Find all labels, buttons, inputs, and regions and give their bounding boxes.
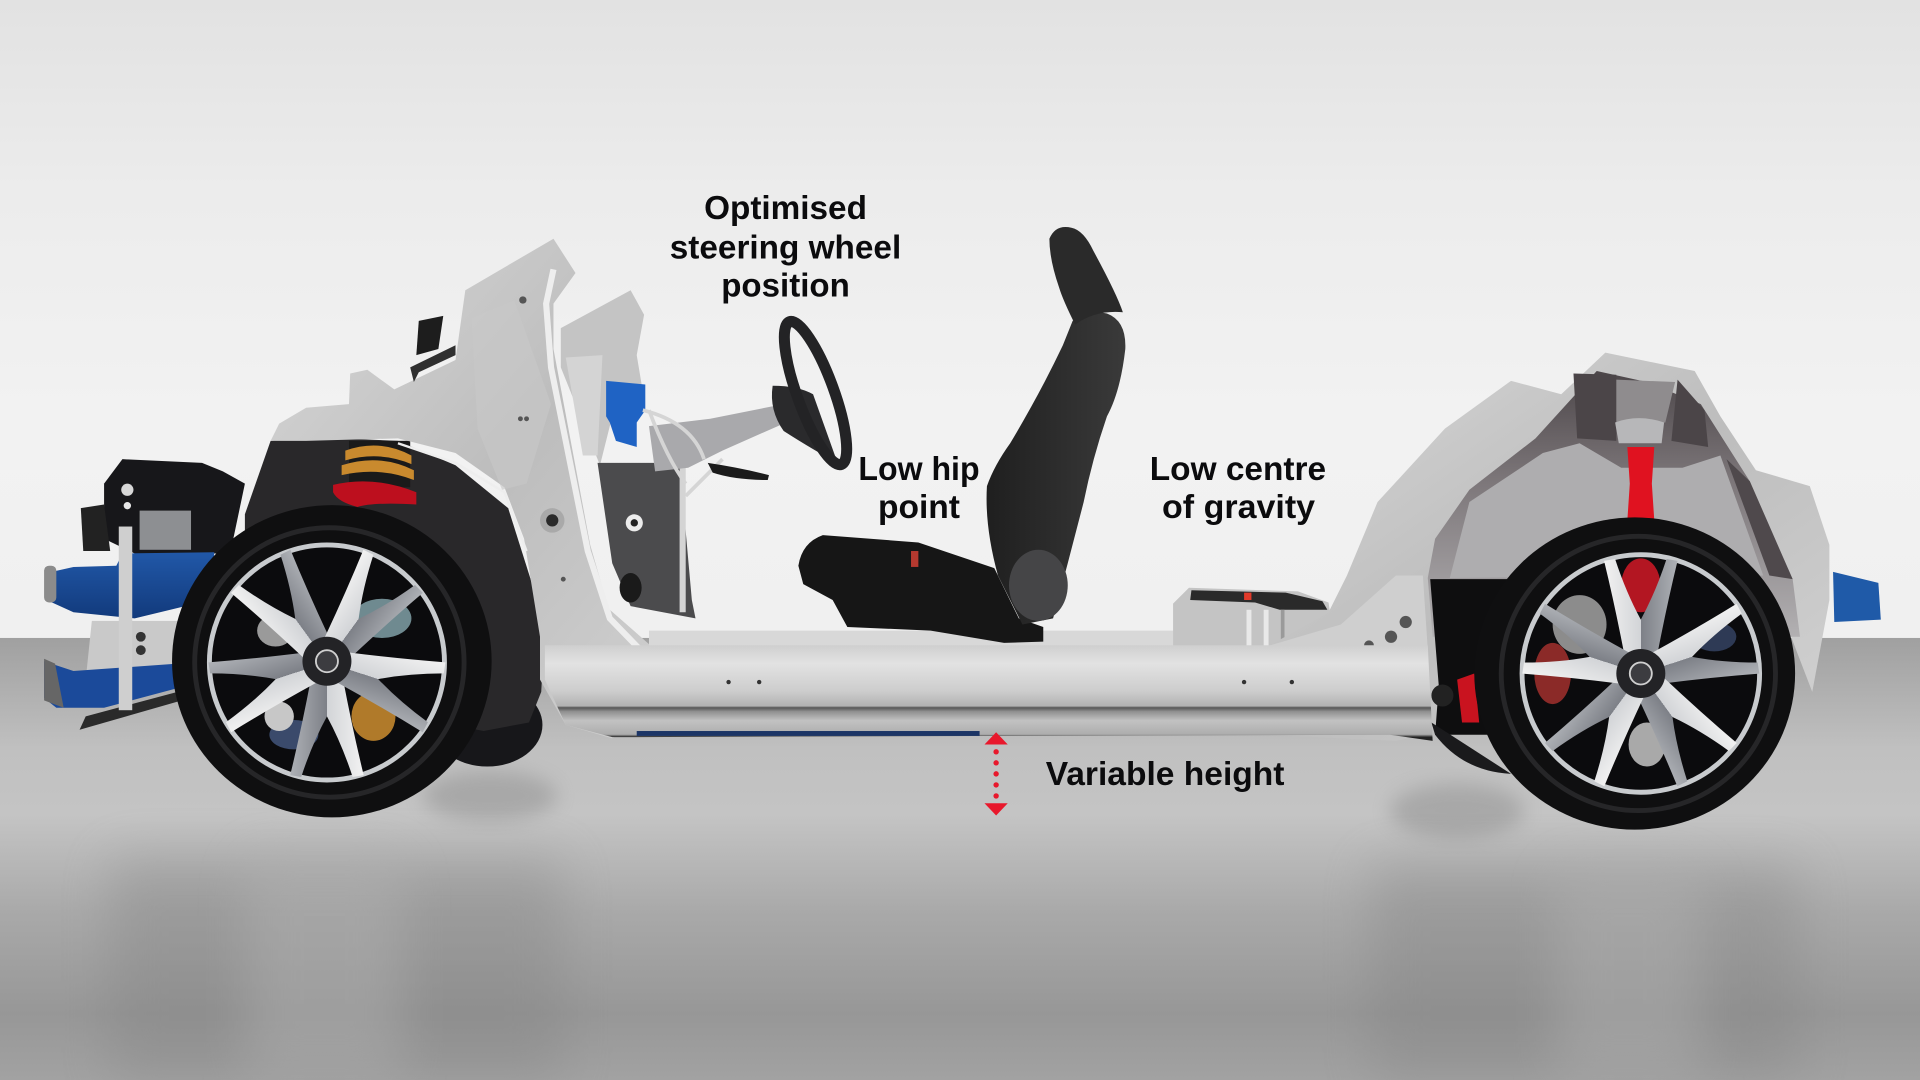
rear strut red: [1615, 418, 1664, 520]
label: low centre of gravity: Low centre: [1150, 451, 1326, 488]
spokes: [207, 548, 447, 777]
front module: radiator and crash structure: [44, 459, 245, 730]
tyre: [172, 505, 492, 817]
inner pillar and footwell: [561, 290, 696, 618]
label: low hip point: Low hip: [858, 451, 980, 488]
polished floor: [0, 638, 1920, 1080]
label: low hip point: [858, 451, 980, 526]
rim: [209, 545, 444, 780]
far side tyre, front axle: [432, 683, 542, 767]
wall backdrop: [0, 0, 1920, 639]
tyre: [1474, 517, 1795, 830]
floor pan: [649, 631, 1176, 650]
label: low centre of gravity: of gravity: [1162, 489, 1316, 526]
rear floor ramp: [1266, 576, 1428, 659]
rear wheel: [1474, 517, 1795, 830]
floor reflections: [110, 771, 1800, 1080]
seat backrest: [987, 313, 1125, 624]
label: steering wheel position: [670, 190, 901, 304]
blue steering bracket: [606, 381, 645, 447]
front wheel arch interior: [245, 437, 545, 731]
hub: [1616, 649, 1665, 698]
rear inner wheel-arch shell: [1428, 371, 1800, 637]
arrow: variable height: [984, 732, 1008, 816]
front body panels: fender and A-pillar: [271, 239, 698, 738]
label: variable height: Variable height: [1046, 756, 1284, 793]
label: steering wheel position: position: [721, 267, 850, 304]
hub: [302, 637, 351, 686]
side sill: [545, 645, 1433, 741]
steering column: [643, 404, 786, 496]
label: low centre of gravity: [1150, 451, 1326, 526]
label: steering wheel position: steering wheel: [670, 229, 901, 266]
label: steering wheel position: Optimised: [704, 190, 867, 227]
front coil spring: [333, 441, 416, 507]
label: low hip point: point: [878, 489, 960, 526]
rear arch dark void: [1430, 579, 1616, 735]
battery pack: [1173, 588, 1335, 649]
recliner cover: [1009, 550, 1068, 621]
rear suspension arm: [1431, 673, 1511, 774]
steering wheel: [772, 315, 859, 471]
headrest: [1049, 227, 1123, 324]
seat cushion: [798, 535, 1043, 643]
rear outer body panel: [1261, 353, 1829, 741]
seat tag: [911, 551, 918, 567]
front wheel: [172, 505, 492, 817]
rear blue bumper beam: [1833, 572, 1881, 622]
spokes: [1521, 559, 1761, 788]
seat: [798, 227, 1125, 643]
rim: [1522, 555, 1760, 792]
